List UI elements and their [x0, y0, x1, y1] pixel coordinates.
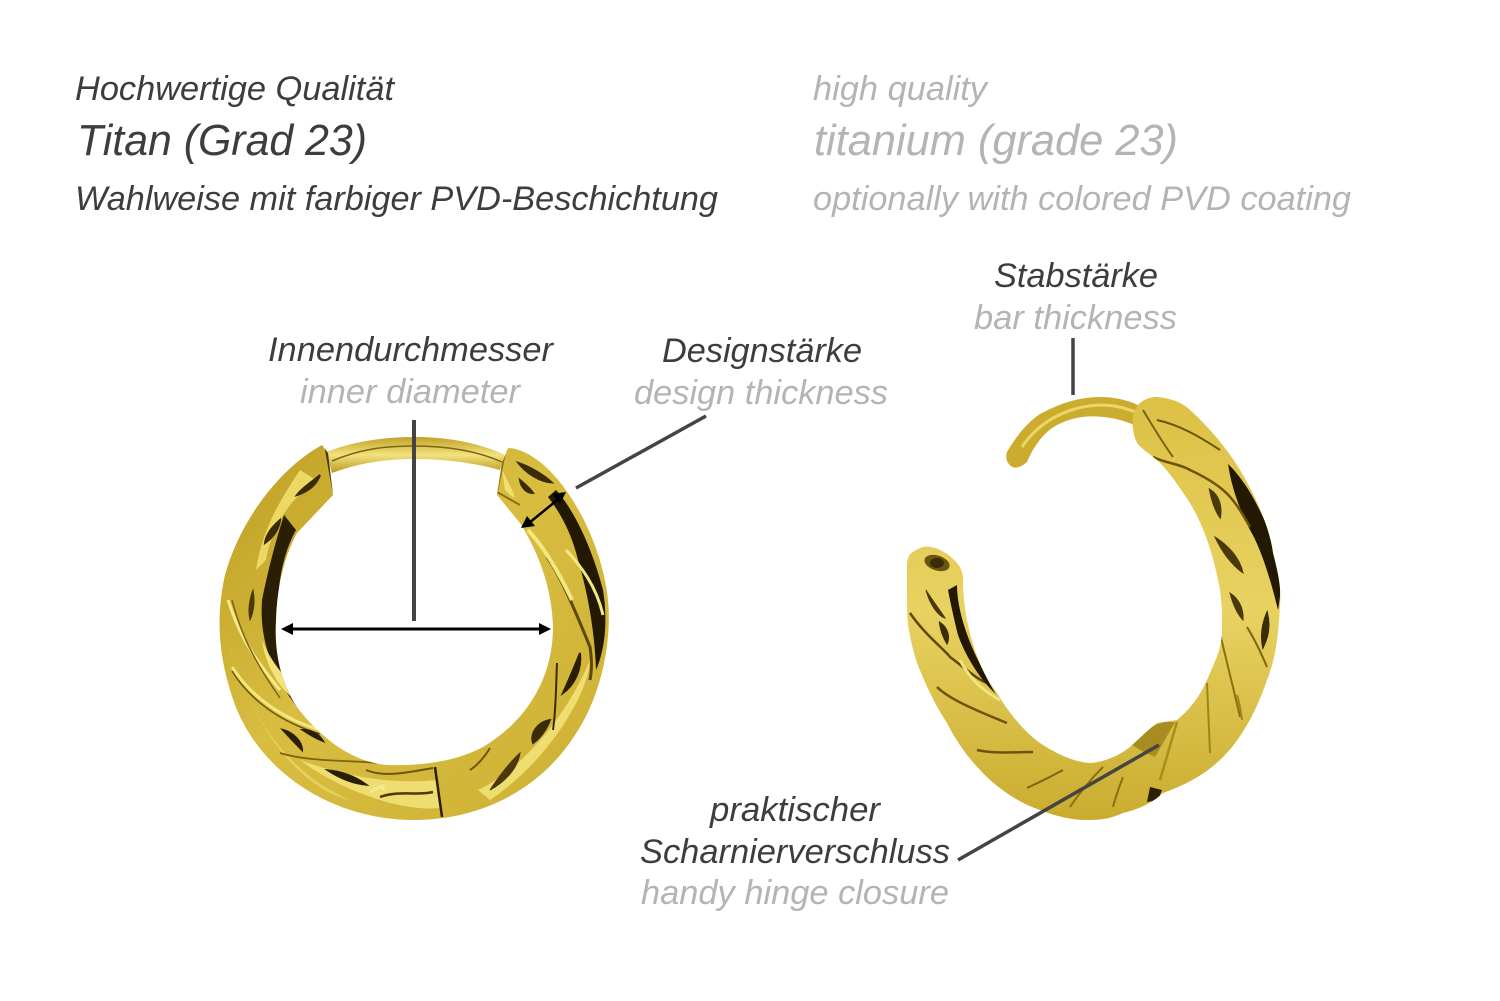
label: praktischer: praktischer: [709, 791, 882, 829]
label: inner diameter: inner diameter: [300, 373, 522, 411]
arrow: design thickness: [521, 492, 566, 528]
heading: English quality line: high quality: [813, 70, 989, 108]
heading: German material: Titan (Grad 23): [77, 116, 367, 165]
heading: English material: titanium (grade 23): [814, 116, 1178, 165]
label: design thickness: design thickness: [634, 374, 888, 412]
heading: German quality line: Hochwertige Qualität: [75, 70, 396, 108]
leader: bar thickness: [1071, 338, 1075, 395]
left ring: front view: [210, 430, 620, 830]
label: handy hinge closure: handy hinge closure: [641, 874, 949, 912]
right ring: open hinge view: [900, 390, 1290, 830]
label: bar thickness: bar thickness: [974, 299, 1177, 337]
label: Stabstärke: Stabstärke: [994, 257, 1158, 295]
ring top wire: [326, 437, 505, 473]
arrow: inner diameter: [281, 623, 551, 635]
heading: German coating note: Wahlweise mit farbiger PVD-Beschichtung: [75, 180, 718, 218]
open ring body: [900, 390, 1290, 830]
leader: design thickness: [576, 416, 706, 488]
twisted pattern on ring body: [226, 447, 605, 817]
label: Innendurchmesser: Innendurchmesser: [268, 331, 555, 369]
label: Scharnierverschluss: Scharnierverschluss: [640, 833, 950, 871]
tube opening: [914, 545, 958, 579]
label: Designstärke: Designstärke: [662, 332, 862, 370]
leader: inner diameter: [412, 420, 416, 621]
leader: hinge closure: [958, 745, 1159, 860]
ring body: [220, 445, 609, 820]
heading: English coating note: optionally with colored PVD coating: [813, 180, 1351, 218]
open hinge wire: [1006, 397, 1138, 468]
twisted pattern on open ring: [910, 410, 1280, 807]
